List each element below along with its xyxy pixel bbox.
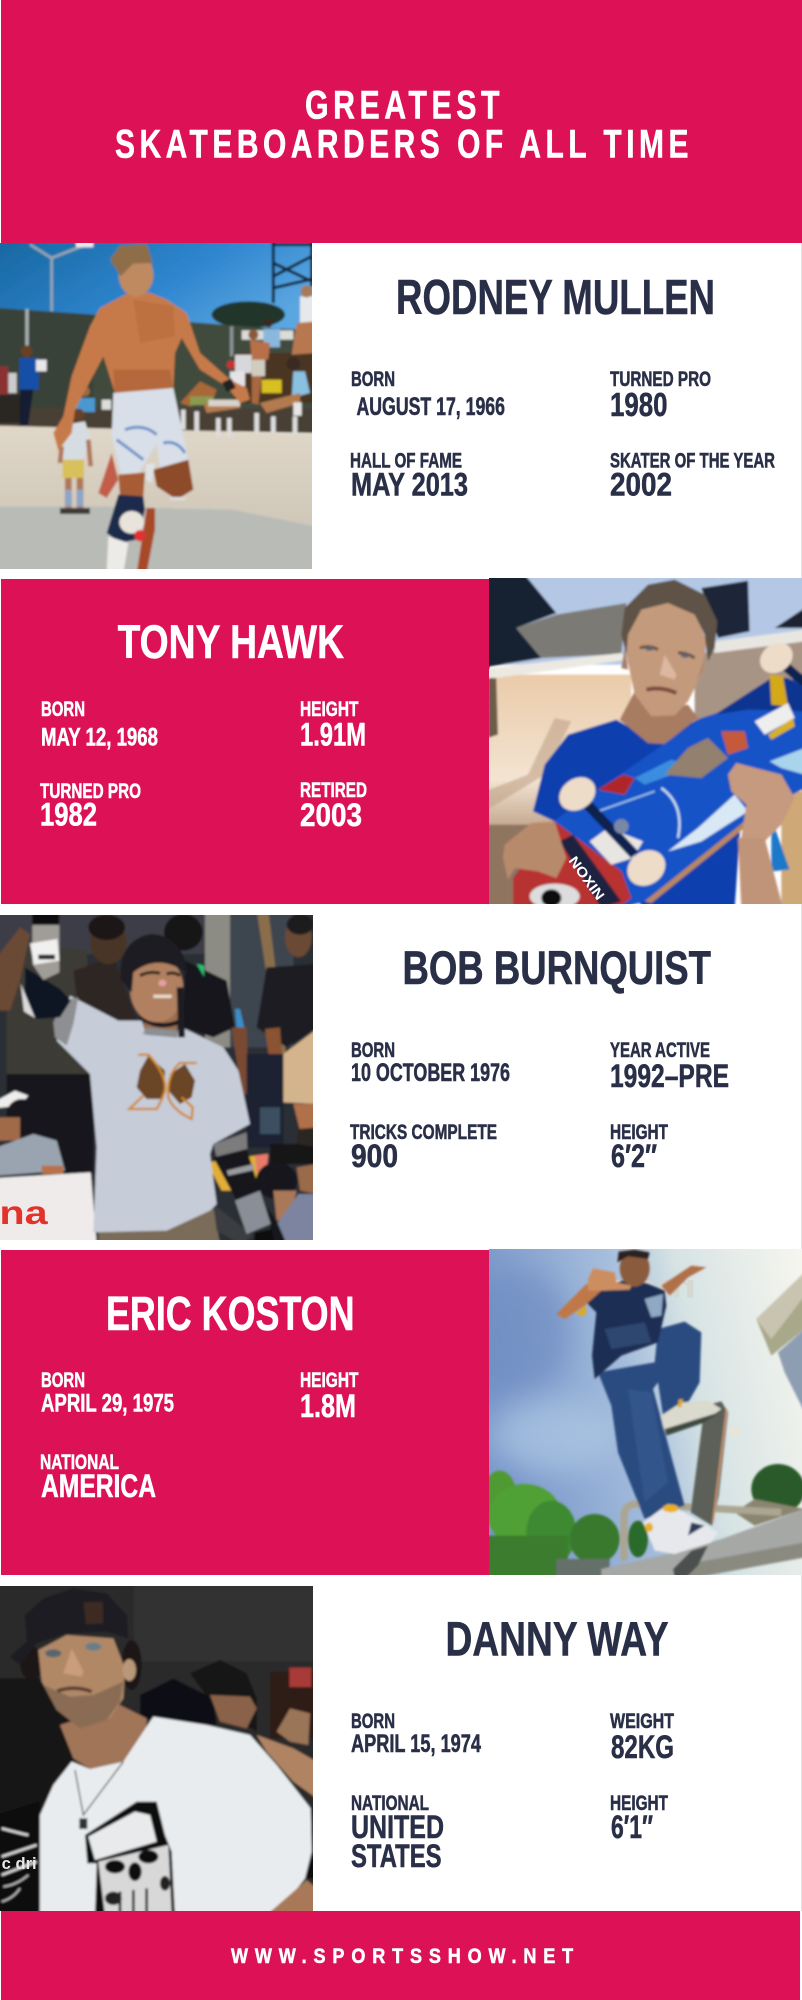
arm behind xyxy=(257,1735,317,1798)
legs xyxy=(118,472,145,496)
stat: turned pro xyxy=(610,368,711,423)
kid in cap xyxy=(0,1091,28,1108)
head xyxy=(130,956,183,1022)
shorts xyxy=(112,388,188,476)
hair xyxy=(20,1647,43,1680)
stat: born: MAY 12, 1968 xyxy=(41,724,158,752)
crowd left xyxy=(0,366,8,396)
header banner xyxy=(1,0,802,243)
hands xyxy=(503,821,566,880)
neck xyxy=(620,691,698,744)
stat: tricks complete: TRICKS COMPLETE xyxy=(350,1121,497,1144)
name: Danny Way: DANNY WAY xyxy=(446,1613,668,1666)
stat: skater of the year: 2002 xyxy=(610,467,672,503)
stat: born: BORN xyxy=(351,1039,395,1062)
name: Eric Koston: ERIC KOSTON xyxy=(106,1288,354,1341)
stat: born xyxy=(41,698,158,752)
photo: Tony Hawk with skateboard xyxy=(489,578,802,904)
board xyxy=(691,1401,728,1526)
stat: retired: 2003 xyxy=(300,797,362,833)
stat: national: STATES xyxy=(351,1838,442,1874)
shirt xyxy=(533,711,748,908)
photo: Danny Way in white skull T-shirt xyxy=(0,1586,313,1911)
photo: Eric Koston on a rail xyxy=(489,1249,802,1575)
stat: height: HEIGHT xyxy=(300,698,359,721)
stat: national: AMERICA xyxy=(41,1468,156,1504)
skull graphic xyxy=(85,1802,175,1915)
panel: Tony Hawk xyxy=(1,575,802,909)
stat: born xyxy=(351,1039,510,1087)
title xyxy=(115,84,693,167)
wheels xyxy=(553,770,602,818)
pants xyxy=(598,1322,701,1519)
kid xyxy=(63,421,91,460)
dark shirt with print xyxy=(0,1802,39,1915)
cap xyxy=(10,1588,128,1665)
shoes xyxy=(661,1401,721,1436)
stat: born xyxy=(351,1710,481,1758)
ramp xyxy=(0,426,317,526)
stat: height: HEIGHT xyxy=(610,1792,668,1815)
stat: born: 10 OCTOBER 1976 xyxy=(351,1059,510,1087)
photo: Rodney Mullen skating xyxy=(0,243,312,569)
stat: born: BORN xyxy=(351,1710,395,1733)
stat: born: APRIL 29, 1975 xyxy=(41,1390,174,1418)
stat: year active: YEAR ACTIVE xyxy=(610,1039,710,1062)
stat: height: 1.91M xyxy=(300,717,366,753)
raised arm xyxy=(25,967,71,1019)
sign text: na xyxy=(0,1195,48,1232)
footer banner xyxy=(1,1911,800,2000)
trees xyxy=(751,1464,802,1514)
stat: turned pro: TURNED PRO xyxy=(610,368,711,391)
stat: height: 6′2″ xyxy=(611,1138,657,1174)
sign xyxy=(0,1172,97,1244)
stat: hall of fame: MAY 2013 xyxy=(351,467,468,503)
stat: turned pro: 1980 xyxy=(610,386,668,423)
stat: height xyxy=(300,1369,359,1424)
stat: tricks complete: 900 xyxy=(351,1138,398,1174)
NOXIN deck text: NOXIN xyxy=(566,853,608,903)
panel: Danny Way xyxy=(0,1582,674,1915)
shirt xyxy=(40,1717,312,1915)
stat: skater of the year xyxy=(610,450,775,503)
stat: hall of fame: HALL OF FAME xyxy=(350,450,462,473)
lower right xyxy=(207,1154,267,1191)
building xyxy=(756,1272,802,1356)
stat: hall of fame xyxy=(350,450,468,503)
panel: Rodney Mullen xyxy=(0,240,775,573)
stat: year active: 1992–PRE xyxy=(610,1058,729,1094)
stat: height: 1.8M xyxy=(300,1388,356,1424)
stat: national: UNITED xyxy=(351,1809,444,1845)
railing xyxy=(624,1504,781,1561)
stat: weight xyxy=(610,1710,674,1765)
stat: born: BORN xyxy=(351,368,395,391)
stat: turned pro: TURNED PRO xyxy=(40,780,141,803)
shirt xyxy=(57,996,250,1232)
stat: weight: WEIGHT xyxy=(610,1710,674,1733)
stat: height: HEIGHT xyxy=(300,1369,359,1392)
crowd right xyxy=(233,353,317,403)
board xyxy=(513,673,802,908)
stat: height xyxy=(610,1121,668,1174)
stat: height xyxy=(610,1792,668,1845)
stat: retired: RETIRED xyxy=(300,779,367,802)
name: Tony Hawk: TONY HAWK xyxy=(118,615,344,668)
panel: Bob Burnquist xyxy=(0,911,729,1244)
body xyxy=(53,293,250,450)
stat: weight: 82KG xyxy=(611,1729,674,1765)
stat: born: BORN xyxy=(41,698,85,721)
stat: turned pro xyxy=(40,780,141,832)
stat: born: AUGUST 17, 1966 xyxy=(356,393,505,421)
shirt xyxy=(585,1279,666,1379)
stat: national xyxy=(351,1792,444,1874)
panel: Eric Koston xyxy=(1,1249,802,1579)
pants xyxy=(98,1207,220,1244)
trucks xyxy=(581,798,635,855)
stat: height: 6′1″ xyxy=(611,1809,653,1845)
stat: born: BORN xyxy=(41,1369,85,1392)
rail xyxy=(601,1509,802,1579)
photo: Bob Burnquist raising arm xyxy=(0,915,313,1240)
stat: height: HEIGHT xyxy=(610,1121,668,1144)
shirt print text: c dri xyxy=(2,1854,37,1873)
website: WWW.SPORTSSHOW.NET xyxy=(231,1945,580,1968)
neck xyxy=(142,1011,178,1036)
stat: national: NATIONAL xyxy=(351,1792,429,1815)
stat: height xyxy=(300,698,366,753)
photo: Eric Koston on a rail: mark xyxy=(589,1268,696,1305)
necklace xyxy=(75,1762,123,1815)
face xyxy=(38,1635,125,1728)
lower arm xyxy=(213,1132,247,1157)
head and arms xyxy=(620,1250,650,1287)
stat: tricks complete xyxy=(350,1121,497,1174)
face xyxy=(623,601,706,716)
stat: national xyxy=(40,1451,156,1504)
stat: turned pro: 1982 xyxy=(40,796,97,832)
stat: born xyxy=(41,1369,174,1418)
neck xyxy=(60,1705,147,1769)
title: GREATEST xyxy=(305,84,504,128)
logo xyxy=(137,1056,165,1099)
stat: national: NATIONAL xyxy=(40,1451,119,1474)
stat: born xyxy=(351,368,505,421)
stat: year active xyxy=(610,1039,729,1094)
stat: born: APRIL 15, 1974 xyxy=(351,1730,481,1758)
stat: retired xyxy=(300,779,367,833)
name: Bob Burnquist: BOB BURNQUIST xyxy=(402,941,711,994)
